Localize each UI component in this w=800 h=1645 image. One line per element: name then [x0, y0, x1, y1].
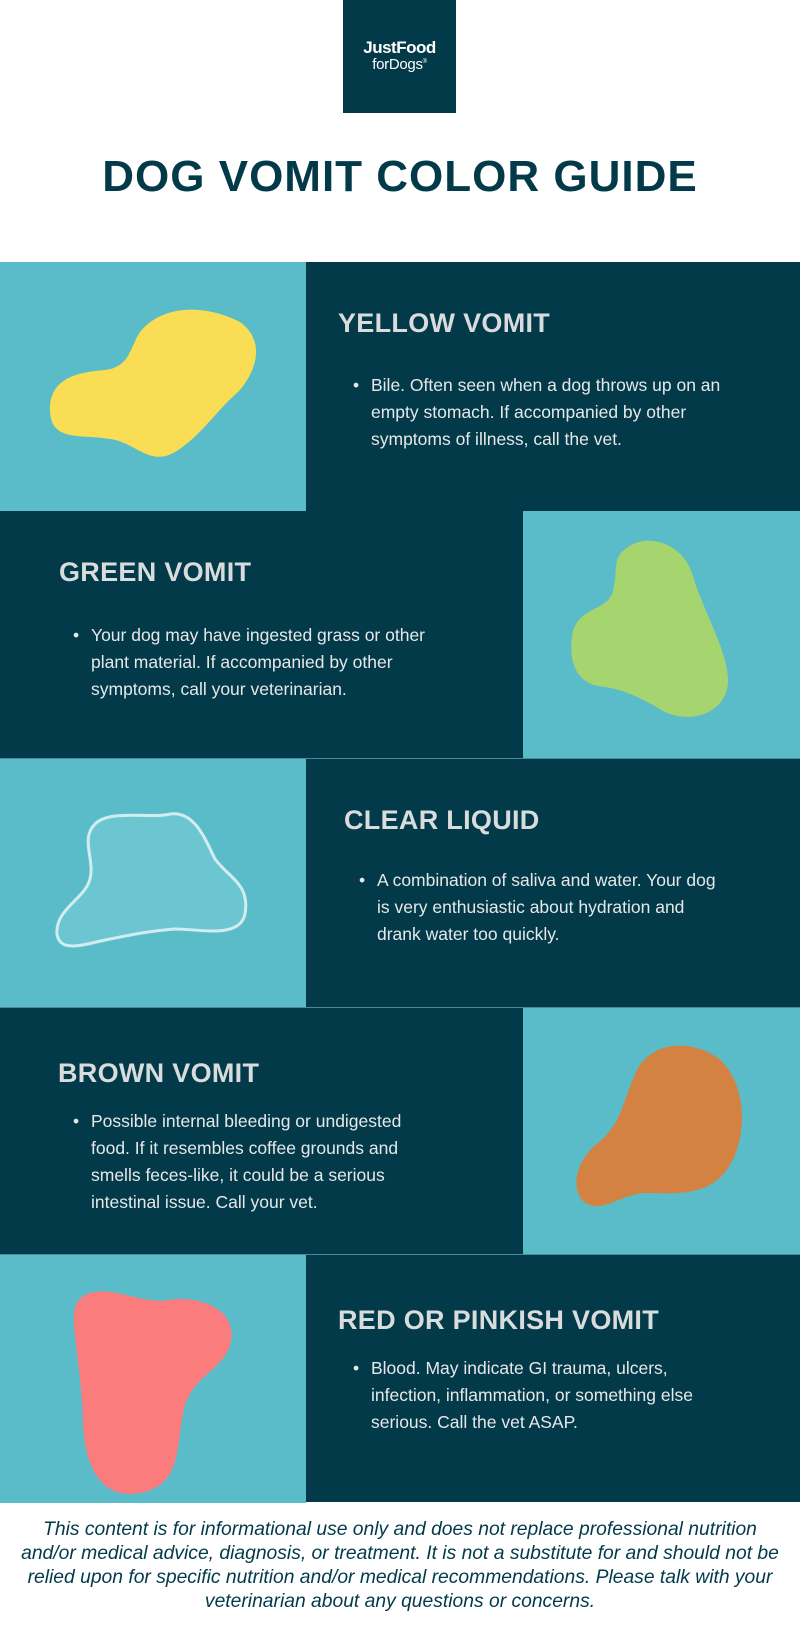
- text: Possible internal bleeding or undigested: [91, 1111, 401, 1131]
- text: empty stomach. If accompanied by other: [371, 402, 686, 422]
- text: drank water too quickly.: [377, 924, 560, 944]
- text: plant material. If accompanied by other: [91, 652, 393, 672]
- panel: yellow vomit: •: [353, 375, 359, 395]
- text: infection, inflammation, or something else: [371, 1385, 693, 1405]
- text: symptoms of illness, call the vet.: [371, 429, 622, 449]
- text: is very enthusiastic about hydration and: [377, 897, 684, 917]
- text: smells feces-like, it could be a serious: [91, 1165, 385, 1185]
- panel: clear liquid: •: [359, 870, 365, 890]
- text: [73, 625, 425, 699]
- icon: brown blob: [576, 1046, 742, 1206]
- text: serious. Call the vet ASAP.: [371, 1412, 578, 1432]
- text: A combination of saliva and water. Your dog: [377, 870, 716, 890]
- disclaimer: and/or medical advice, diagnosis, or treatment. It is not a substitute for and should not be: [21, 1543, 779, 1564]
- logo: forDogs®: [372, 56, 427, 73]
- text: [353, 1358, 693, 1432]
- panel: red vomit: [0, 1254, 800, 1502]
- logo: JustFood: [363, 38, 436, 57]
- heading: CLEAR LIQUID: [344, 805, 540, 835]
- heading: YELLOW VOMIT: [338, 308, 550, 338]
- title: DOG VOMIT COLOR GUIDE: [102, 152, 698, 201]
- panel: green vomit: [0, 511, 800, 758]
- text: Your dog may have ingested grass or other: [91, 625, 425, 645]
- disclaimer: relied upon for specific nutrition and/or medical recommendations. Please talk with your: [28, 1567, 772, 1588]
- panel: green vomit: •: [73, 625, 79, 645]
- panel: red vomit: •: [353, 1358, 359, 1378]
- heading: GREEN VOMIT: [59, 557, 251, 587]
- text: symptoms, call your veterinarian.: [91, 679, 347, 699]
- text: Bile. Often seen when a dog throws up on an: [371, 375, 720, 395]
- red blob panel: [0, 1255, 306, 1503]
- text: [353, 375, 720, 449]
- icon: green blob: [571, 540, 728, 717]
- text: Blood. May indicate GI trauma, ulcers,: [371, 1358, 668, 1378]
- heading: BROWN VOMIT: [58, 1058, 259, 1088]
- clear blob panel: [0, 759, 306, 1008]
- text: [73, 1111, 401, 1212]
- icon: red blob: [74, 1291, 232, 1494]
- logo: [343, 0, 456, 113]
- heading: RED OR PINKISH VOMIT: [338, 1305, 659, 1335]
- disclaimer: This content is for informational use only and does not replace professional nutrition: [43, 1519, 757, 1540]
- panel: clear liquid: [0, 758, 800, 1007]
- panel: brown vomit: •: [73, 1111, 79, 1131]
- brown blob panel: [523, 1008, 800, 1255]
- yellow blob panel: [0, 262, 306, 511]
- icon: yellow blob: [50, 310, 256, 457]
- panel: brown vomit: [0, 1007, 800, 1254]
- disclaimer: [21, 1519, 779, 1612]
- panel: yellow vomit: [0, 262, 800, 511]
- disclaimer: veterinarian about any questions or concerns.: [205, 1591, 595, 1612]
- text: food. If it resembles coffee grounds and: [91, 1138, 398, 1158]
- green blob panel: [523, 511, 800, 758]
- icon: clear blob: [55, 812, 248, 948]
- text: intestinal issue. Call your vet.: [91, 1192, 318, 1212]
- text: [359, 870, 716, 944]
